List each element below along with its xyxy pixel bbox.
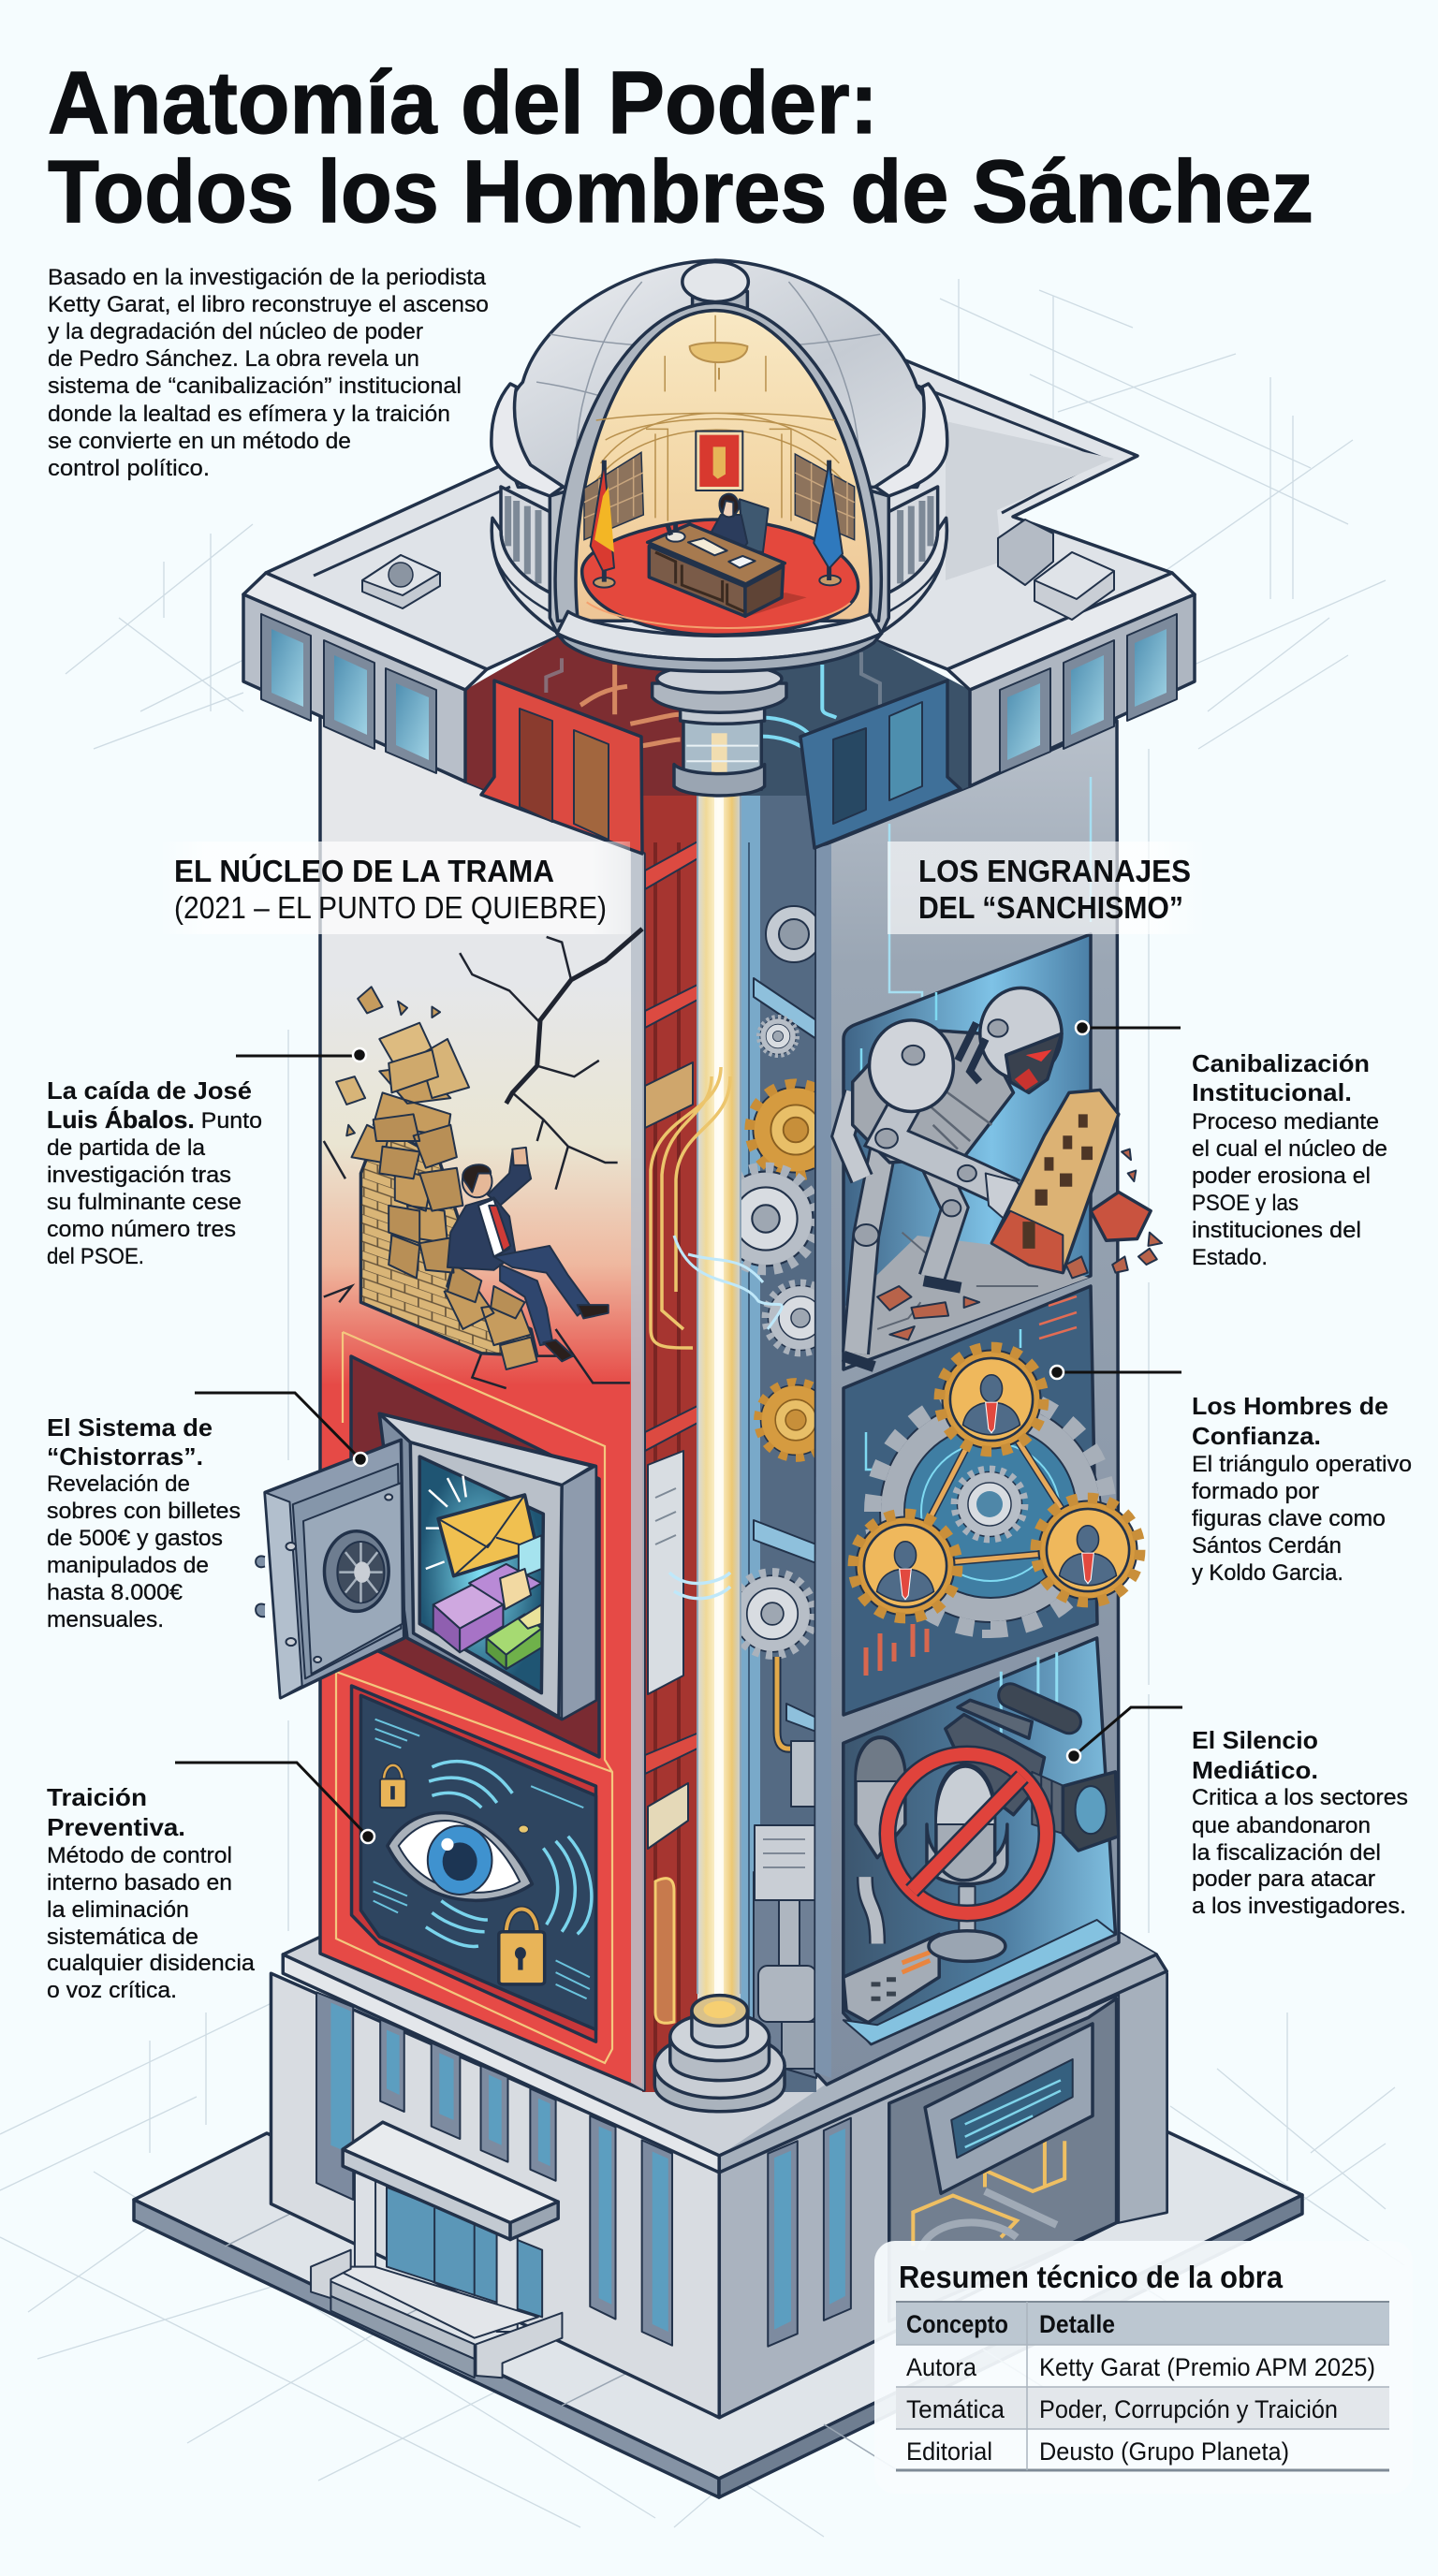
- money stacks: [433, 1564, 541, 1669]
- arched interior: [555, 302, 881, 621]
- building illustration: [134, 260, 1302, 2497]
- wall surface: [320, 711, 644, 2090]
- text: los hombres de confianza: y Koldo Garcia.: [1192, 1560, 1343, 1586]
- section heading: el núcleo de la trama: EL NÚCLEO DE LA TRAMA: [174, 854, 554, 888]
- entrance columns: [355, 2166, 518, 2332]
- text: la caída de José Luis Ábalos: su fulminante cese: [47, 1190, 242, 1215]
- intro text block: control político.: [48, 456, 210, 481]
- panel: resumen técnico: [874, 2241, 1413, 2494]
- robot torso: [853, 1028, 1013, 1163]
- panel frame: [352, 1686, 596, 2042]
- text: los hombres de confianza: figuras clave como: [1192, 1506, 1386, 1531]
- summary table: Deusto (Grupo Planeta): [1039, 2437, 1289, 2466]
- summary table: Concepto: [906, 2310, 1008, 2338]
- right wing: [947, 573, 1195, 786]
- text: traición preventiva: Preventiva.: [47, 1813, 185, 1841]
- padlock small: [380, 1765, 406, 1808]
- text: canibalización institucional: poder erosiona el: [1192, 1164, 1371, 1189]
- text: el sistema de chistorras: [47, 1413, 241, 1632]
- cutaway interior under dome: [465, 636, 970, 854]
- desk: [648, 524, 785, 616]
- right face vertical windows: [768, 2118, 851, 2347]
- robot scene panel: [844, 934, 1162, 1369]
- roof vent box: [362, 555, 440, 608]
- text: traición preventiva: cualquier disidencia: [47, 1951, 255, 1976]
- text: traición preventiva: [47, 1783, 255, 2003]
- media silence scene panel: [844, 1638, 1119, 2044]
- title: [48, 53, 1313, 242]
- background gear: [873, 1394, 1108, 1630]
- text: los hombres de confianza: formado por: [1192, 1479, 1319, 1504]
- shaft gears: [714, 906, 842, 1655]
- intro text block: Ketty Garat, el libro reconstruye el ascenso: [48, 292, 489, 317]
- intro text block: sistema de “canibalización” institucional: [48, 373, 462, 399]
- podium left face: [271, 1973, 719, 2418]
- right wall panel: los engranajes: [815, 721, 1162, 2085]
- callout lines: [175, 1028, 1182, 1837]
- podium base with windows and entrance: [271, 1971, 1167, 2418]
- text: el sistema de chistorras: manipulados de: [47, 1553, 209, 1578]
- text: canibalización institucional: Canibalización: [1192, 1049, 1370, 1077]
- blue cut frame: [800, 681, 961, 848]
- upper pipe collar: [653, 665, 786, 796]
- text: la caída de José Luis Ábalos: de partida de la: [47, 1135, 205, 1161]
- open safe: [256, 1413, 596, 1720]
- text: el silencio mediático: [1192, 1726, 1408, 1919]
- dome shell: [506, 260, 932, 487]
- text: el sistema de chistorras: mensuales.: [47, 1607, 164, 1632]
- cupola finial: [682, 262, 748, 315]
- safe door: [256, 1440, 404, 1698]
- intro text block: se convierte en un método de: [48, 429, 351, 454]
- section banner left: [159, 842, 630, 934]
- left collar: [492, 384, 564, 496]
- section heading: los engranajes: LOS ENGRANAJES: [918, 854, 1191, 888]
- robot front arm: [887, 1082, 1013, 1194]
- text: los hombres de confianza: [1192, 1392, 1412, 1586]
- crack lines: [324, 929, 642, 1388]
- text: canibalización institucional: el cual el núcleo de: [1192, 1136, 1387, 1162]
- text: los hombres de confianza: Los Hombres de: [1192, 1392, 1388, 1420]
- summary table: Detalle: [1039, 2310, 1115, 2338]
- flag of Spain: [591, 461, 615, 588]
- text: la caída de José Luis Ábalos: del PSOE.: [47, 1244, 144, 1269]
- section heading: los engranajes: [918, 854, 1191, 925]
- safe interior: [419, 1456, 543, 1693]
- text: el sistema de chistorras: “Chistorras”.: [47, 1442, 203, 1471]
- official figure: [705, 494, 747, 549]
- robot rear arm: [844, 1092, 862, 1178]
- energy beam: [651, 796, 782, 2003]
- text: traición preventiva: la eliminación: [47, 1897, 189, 1923]
- text: canibalización institucional: [1192, 1049, 1387, 1270]
- summary table: Editorial: [906, 2437, 992, 2466]
- roof equipment boxes: [998, 520, 1114, 620]
- person gear right: [1035, 1498, 1140, 1603]
- text: el silencio mediático: El Silencio: [1192, 1726, 1318, 1754]
- podium top slab: [283, 1934, 1167, 2173]
- surveillance eye panel: [352, 1686, 596, 2042]
- gold decorative line: [336, 1332, 612, 2063]
- section heading: el núcleo de la trama: (2021 – EL PUNTO DE QUIEBRE): [174, 890, 607, 925]
- left wing: [243, 573, 487, 782]
- mini bar chart: [866, 1624, 927, 1676]
- intro text block: Basado en la investigación de la periodista: [48, 265, 487, 290]
- collapsing brick wall: [336, 987, 537, 1369]
- central microphone: [927, 1764, 1007, 1961]
- text: el sistema de chistorras: sobres con billetes: [47, 1499, 241, 1524]
- text: los hombres de confianza: El triángulo operativo: [1192, 1452, 1412, 1477]
- left face vertical windows: [316, 1992, 672, 2346]
- eye: [388, 1813, 532, 1900]
- title: Anatomía del Poder:: [48, 53, 878, 153]
- trusted men gears scene panel: [844, 1286, 1140, 1715]
- envelope: [438, 1495, 537, 1576]
- red cut frame: [481, 681, 642, 854]
- intro text block: [48, 265, 489, 481]
- text: los hombres de confianza: Sántos Cerdán: [1192, 1533, 1342, 1559]
- falling man: [448, 1148, 609, 1361]
- wall painting: [696, 432, 742, 490]
- text: el sistema de chistorras: Revelación de: [47, 1471, 190, 1497]
- wall surface: [815, 721, 1119, 2085]
- text: canibalización institucional: Estado.: [1192, 1245, 1268, 1270]
- intro text block: donde la lealtad es efímera y la traición: [48, 402, 450, 427]
- text: el silencio mediático: Critica a los sectores: [1192, 1785, 1408, 1810]
- robot head: [980, 988, 1062, 1079]
- left wall panel: el núcleo de la trama: [256, 711, 644, 2090]
- padlock large: [499, 1910, 545, 1984]
- entrance canopy: [343, 2122, 558, 2239]
- text: el silencio mediático: a los investigadores.: [1192, 1894, 1406, 1919]
- drum and collar ring: [492, 384, 947, 634]
- text: el silencio mediático: que abandonaron: [1192, 1813, 1371, 1838]
- wall panel lines: [606, 418, 836, 521]
- text: traición preventiva: interno basado en: [47, 1870, 232, 1895]
- wall screen: [925, 2024, 1093, 2193]
- safe recess: [351, 1356, 599, 1757]
- intro text block: y la degradación del núcleo de poder: [48, 319, 423, 344]
- text: traición preventiva: Método de control: [47, 1843, 232, 1868]
- text: canibalización institucional: instituciones del: [1192, 1218, 1361, 1243]
- right drum columns: [877, 487, 946, 634]
- summary table: Poder, Corrupción y Traición: [1039, 2395, 1338, 2423]
- text: la caída de José Luis Ábalos: como número tres: [47, 1217, 236, 1242]
- text: el silencio mediático: Mediático.: [1192, 1756, 1318, 1784]
- safe frame: [379, 1413, 596, 1720]
- red shaft side: [642, 796, 704, 2092]
- left microphone: [856, 1737, 905, 1858]
- summary table: Autora: [906, 2353, 977, 2381]
- panel title: Resumen técnico de la obra: [899, 2260, 1284, 2294]
- recorder device: [844, 1877, 939, 2023]
- text: canibalización institucional: Proceso mediante: [1192, 1109, 1379, 1134]
- video camera: [946, 1695, 1119, 1851]
- left drum columns: [492, 487, 562, 634]
- left pier: [550, 489, 576, 634]
- signal arcs: [426, 1762, 592, 1946]
- right collar: [875, 384, 947, 496]
- person gear top: [939, 1347, 1044, 1452]
- text: canibalización institucional: Institucional.: [1192, 1078, 1352, 1106]
- triangle links: [905, 1399, 1088, 1566]
- text: la caída de José Luis Ábalos: investigación tras: [47, 1163, 231, 1188]
- text: traición preventiva: sistemática de: [47, 1925, 198, 1950]
- ground platform: [134, 2132, 1302, 2497]
- text: la caída de José Luis Ábalos: Luis Ábalos. Punto: [47, 1105, 262, 1134]
- text: el silencio mediático: la fiscalización del: [1192, 1840, 1381, 1866]
- robot figure: [844, 988, 1062, 1367]
- section heading: el núcleo de la trama: [174, 854, 607, 925]
- text: la caída de José Luis Ábalos: La caída de José: [47, 1076, 252, 1105]
- text: canibalización institucional: PSOE y las: [1192, 1191, 1299, 1216]
- entrance doors: [387, 2188, 542, 2317]
- flag of Europe: [814, 461, 843, 585]
- callout dots: [353, 1021, 1089, 1843]
- blue shaft side: [738, 796, 816, 2092]
- central shaft with shelves: [642, 796, 842, 2112]
- podium right face: [719, 1973, 1167, 2418]
- upper block with roof and wings: [243, 356, 1195, 854]
- text: traición preventiva: Traición: [47, 1783, 147, 1811]
- machinery recess: [889, 1971, 1167, 2321]
- text: la caída de José Luis Ábalos: [47, 1076, 262, 1269]
- text: el sistema de chistorras: de 500€ y gastos: [47, 1526, 223, 1551]
- bookshelves: [584, 452, 855, 540]
- text: traición preventiva: o voz crítica.: [47, 1978, 177, 2003]
- floor ledge: [557, 611, 882, 671]
- office scene: [557, 418, 882, 671]
- text: el silencio mediático: poder para atacar: [1192, 1866, 1375, 1892]
- text: el sistema de chistorras: hasta 8.000€: [47, 1580, 183, 1605]
- summary table: Ketty Garat (Premio APM 2025): [1039, 2353, 1375, 2381]
- summary table: [896, 2302, 1389, 2470]
- intro text block: de Pedro Sánchez. La obra revela un: [48, 346, 419, 372]
- machinery and pipes lower shaft: [755, 1657, 816, 2069]
- summary table: Temática: [906, 2395, 1005, 2423]
- panel backdrop: [874, 2241, 1413, 2494]
- prohibition sign: [888, 1754, 1047, 1913]
- section heading: los engranajes: DEL “SANCHISMO”: [918, 890, 1183, 925]
- beam base pedestal: [654, 1996, 785, 2112]
- chair: [740, 499, 769, 552]
- section banner right: [888, 842, 1206, 934]
- right pier: [863, 489, 888, 634]
- roof terrace: [266, 356, 1172, 669]
- entrance steps: [311, 2250, 562, 2378]
- crumbling tower model: [991, 1090, 1162, 1278]
- dome with office: [492, 260, 947, 671]
- text: el sistema de chistorras: El Sistema de: [47, 1413, 213, 1442]
- person gear left: [853, 1514, 958, 1618]
- text: los hombres de confianza: Confianza.: [1192, 1422, 1321, 1450]
- red carpet floor: [582, 520, 858, 635]
- robot legs: [856, 1147, 955, 1354]
- title: Todos los Hombres de Sánchez: [48, 142, 1313, 242]
